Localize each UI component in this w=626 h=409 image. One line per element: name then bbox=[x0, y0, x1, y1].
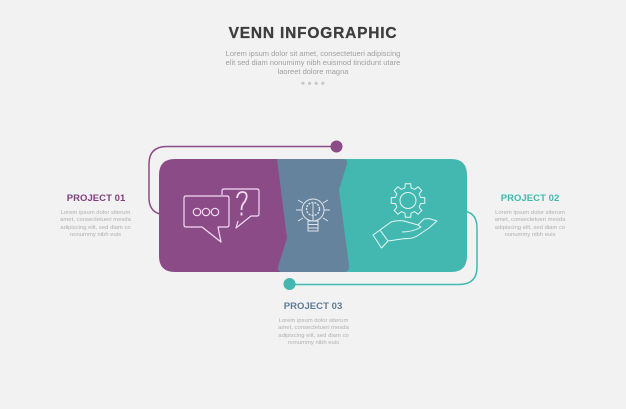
project 02 text: adipiscing elit, sed diam co bbox=[495, 225, 565, 231]
icon: light bulb bbox=[296, 199, 330, 231]
connector: project 01 bbox=[149, 140, 342, 214]
connector: project 02 bbox=[284, 212, 477, 290]
panel: project 01 purple bbox=[159, 159, 295, 272]
project 01 text: nonummy nibh euis bbox=[70, 232, 121, 238]
project 02 text: nonummy nibh euis bbox=[504, 232, 556, 238]
panel: project 02 teal bbox=[330, 159, 467, 272]
project 01 text: adipiscing elit, sed diam co bbox=[60, 225, 131, 231]
project 03 text: Lorem ipsum dolor siterum bbox=[279, 318, 348, 324]
intro text: elit sed diam nonumimy nibh euismod tincidunt utare bbox=[226, 58, 400, 67]
icon: speech bubbles bbox=[184, 189, 259, 242]
intro text bbox=[226, 48, 400, 76]
project 02 heading: PROJECT 02 bbox=[501, 193, 559, 204]
panel: project 03 overlap bbox=[277, 159, 349, 272]
pagination dots bbox=[301, 82, 324, 85]
intro text: Lorem ipsum dolor sit amet, consectetueri adipiscing bbox=[226, 48, 400, 58]
project 02 text: amet, consectetueri mesda bbox=[495, 217, 565, 223]
title: VENN INFOGRAPHIC bbox=[229, 25, 397, 42]
project 03 heading: PROJECT 03 bbox=[284, 300, 342, 312]
project 01 heading: PROJECT 01 bbox=[67, 193, 125, 204]
project 03 text: amet, consectetueri mesda bbox=[278, 325, 349, 331]
project 03 text bbox=[278, 318, 349, 346]
project 03 text: nonummy nibh euis bbox=[288, 340, 339, 346]
intro text: laoreet dolore magna bbox=[278, 67, 348, 76]
project 02 text bbox=[494, 210, 566, 238]
icon: gear in hand bbox=[373, 184, 437, 248]
project 01 text bbox=[60, 210, 131, 238]
project 03 text: adipiscing elit, sed diam co bbox=[278, 333, 349, 339]
project 01 text: amet, consectetueri mesda bbox=[60, 217, 131, 223]
project 02 text: Lorem ipsum dolor siterum bbox=[495, 210, 565, 216]
project 01 text: Lorem ipsum dolor siterum bbox=[61, 210, 130, 216]
